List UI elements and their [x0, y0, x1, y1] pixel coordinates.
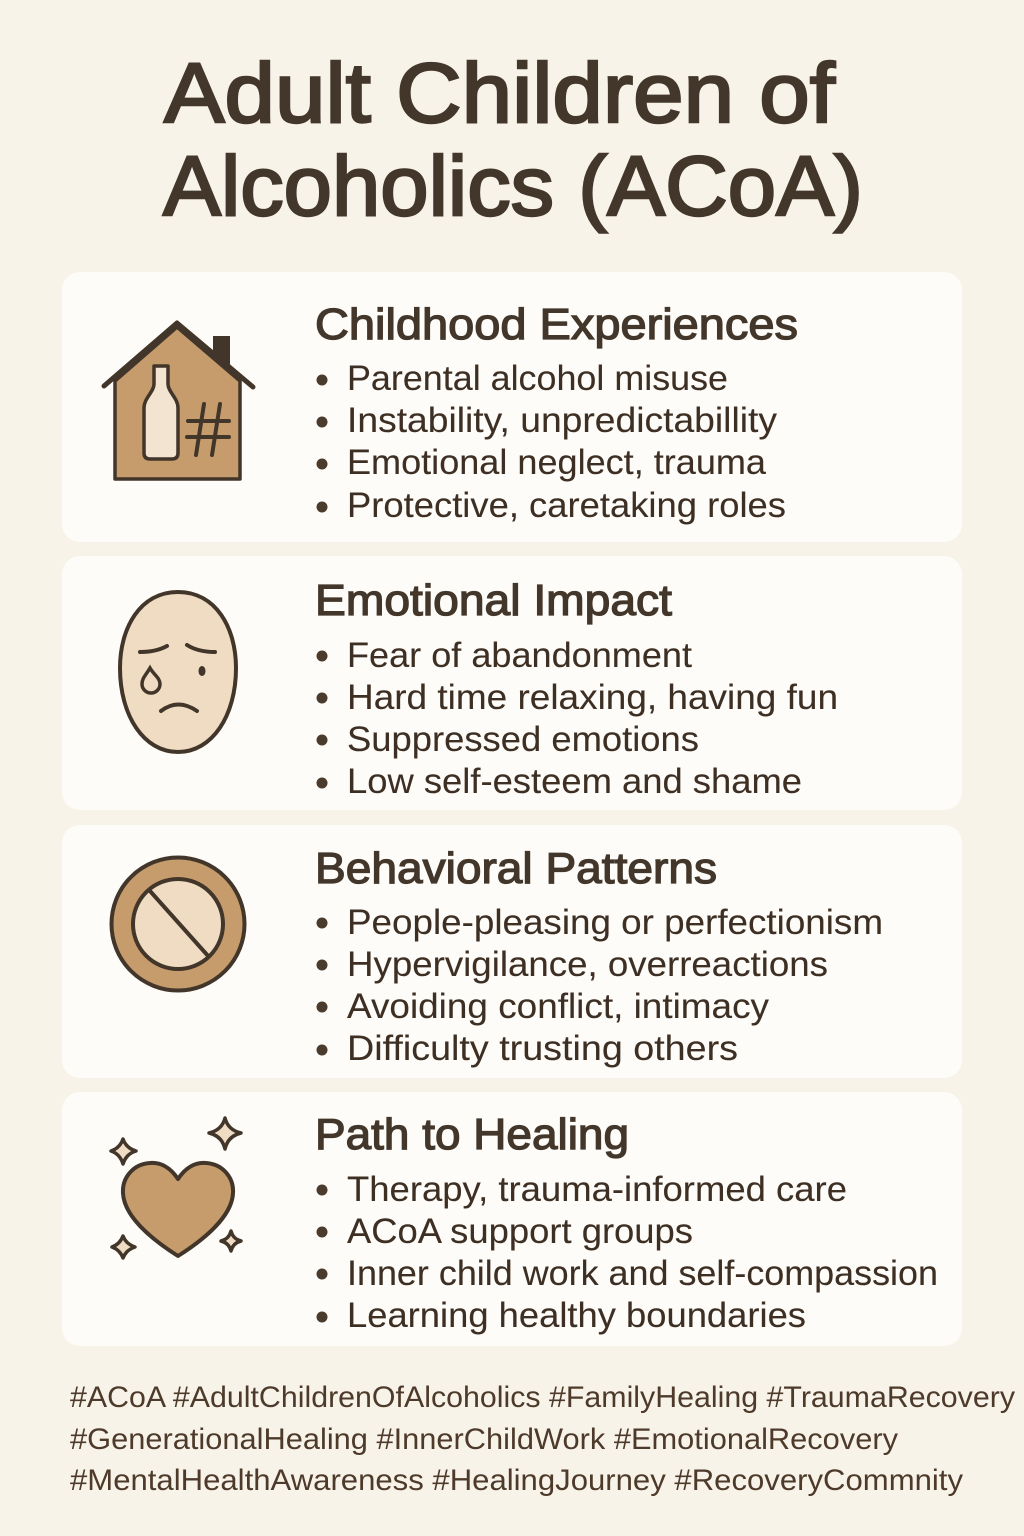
title: Adult Children of	[164, 46, 836, 140]
panel: childhood experiences	[62, 272, 962, 542]
hashtags: #MentalHealthAwareness #HealingJourney #RecoveryCommnity	[70, 1464, 963, 1497]
bullet list: Fear of abandonment	[347, 636, 692, 675]
hashtags: #GenerationalHealing #InnerChildWork #EmotionalRecovery	[70, 1423, 898, 1456]
bullet list: People-pleasing or perfectionism	[347, 903, 883, 942]
bullet list: Parental alcohol misuse	[347, 359, 728, 398]
bullet list: Hypervigilance, overreactions	[347, 945, 828, 984]
panel: path to healing	[62, 1092, 962, 1346]
icon: house with bottle and hash	[104, 323, 253, 479]
title: Alcoholics (ACoA)	[163, 139, 863, 233]
bullet list	[316, 636, 838, 801]
hashtags	[70, 1381, 1015, 1497]
icon: sad face with tear	[120, 592, 236, 752]
bullet list: Emotional neglect, trauma	[347, 443, 767, 482]
heading: Childhood Experiences	[315, 300, 798, 349]
bullet list: Therapy, trauma-informed care	[347, 1170, 847, 1209]
heading: Behavioral Patterns	[315, 844, 717, 893]
bullet list: Difficulty trusting others	[347, 1029, 738, 1068]
bullet list: Learning healthy boundaries	[347, 1296, 806, 1335]
bullet list	[316, 1170, 938, 1335]
icon: heart with sparkles	[111, 1118, 241, 1258]
heading: Emotional Impact	[315, 576, 672, 625]
title	[163, 46, 863, 233]
bullet list: Hard time relaxing, having fun	[347, 678, 838, 717]
panel: emotional impact	[62, 556, 962, 810]
bullet list: ACoA support groups	[347, 1212, 693, 1251]
bullet list	[316, 359, 786, 525]
panel: behavioral patterns	[62, 825, 962, 1078]
heading: Path to Healing	[315, 1110, 629, 1159]
bullet list: Avoiding conflict, intimacy	[347, 987, 770, 1026]
bullet list: Suppressed emotions	[347, 720, 699, 759]
bullet list: Low self-esteem and shame	[347, 762, 802, 801]
hashtags: #ACoA #AdultChildrenOfAlcoholics #FamilyHealing #TraumaRecovery	[70, 1381, 1015, 1414]
bullet list: Protective, caretaking roles	[347, 486, 786, 525]
bullet list: Instability, unpredictabillity	[347, 401, 778, 440]
bullet list: Inner child work and self-compassion	[347, 1254, 938, 1293]
icon: prohibition sign	[112, 858, 244, 990]
bullet list	[316, 903, 883, 1068]
